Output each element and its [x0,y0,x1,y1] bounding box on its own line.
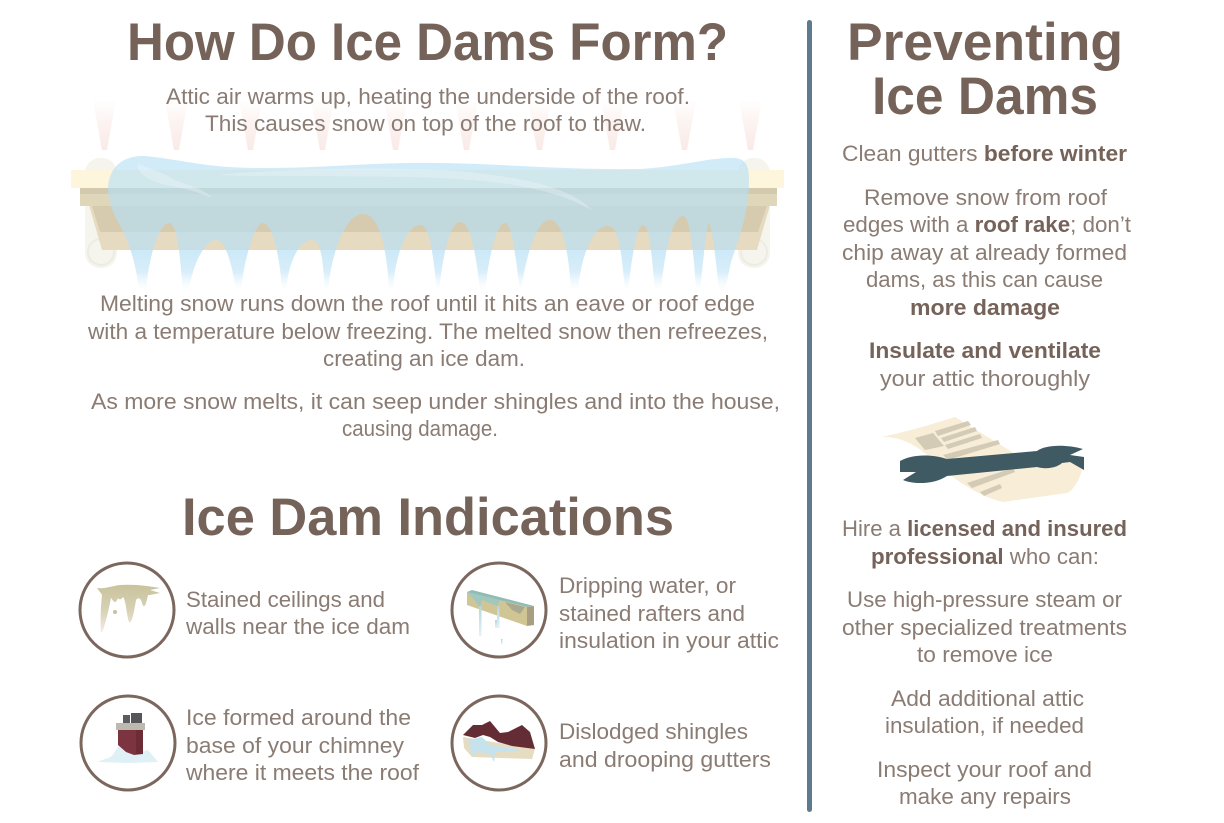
text: high-pressure steam [842,587,1127,667]
snow highlights [138,164,593,211]
icon: dislodged shingles [452,696,546,790]
text: melting snow [87,291,768,371]
text: melting snow: with a temperature below freezing. The melted snow then refreezes, [87,319,768,344]
text: melting snow: creating an ice dam. [323,346,525,371]
text: add insulation: insulation, if needed [885,713,1084,738]
text: insulate and ventilate [869,338,1101,391]
text: dripping water [559,573,779,653]
text: inspect roof: make any repairs [899,784,1071,809]
text: dripping water: stained rafters and [559,601,745,626]
text: stained ceilings [185,587,410,639]
text: as more snow melts: causing damage. [342,416,498,441]
text: dislodged shingles: and drooping gutters [559,747,771,772]
text: remove snow: more damage [910,295,1060,320]
text: dislodged shingles [559,719,771,772]
text: ice around chimney: where it meets the roof [185,760,420,785]
heading: preventing ice dams: Ice Dams [872,67,1098,126]
panel: ice dam indications [80,488,779,790]
text: high-pressure steam: other specialized treatments [842,615,1127,640]
panel: preventing ice dams [842,13,1131,809]
text: as more snow melts [91,389,780,441]
text: insulate and ventilate: your attic thoroughly [880,366,1090,391]
heading: how do ice dams form: How Do Ice Dams Form? [127,13,728,72]
text: inspect roof [877,757,1092,809]
text: ice around chimney: base of your chimney [186,733,404,758]
text: dripping water: Dripping water, or [559,573,736,598]
text: dripping water: insulation in your attic [559,628,779,653]
icon: stained ceiling [80,563,174,657]
heading: preventing ice dams: Preventing [847,13,1123,72]
heading: preventing ice dams [847,13,1123,126]
text: high-pressure steam: Use high-pressure steam or [847,587,1122,612]
text: hire a professional: Hire a licensed and insured [842,516,1127,541]
text: as more snow melts: As more snow melts, it can seep under shingles and into the house, [91,389,780,414]
roof eave [71,170,784,250]
text: remove snow: dams, as this can cause [866,267,1103,292]
heat rising cones [93,100,762,150]
text: hire a professional [842,516,1127,569]
text: ice around chimney [185,705,420,785]
text: inspect roof: Inspect your roof and [877,757,1092,782]
text: attic air warms [166,84,690,136]
text: ice around chimney: Ice formed around the [186,705,411,730]
text: dislodged shingles: Dislodged shingles [559,719,748,744]
text: clean gutters: Clean gutters before winter [842,141,1127,166]
heading: ice dam indications: Ice Dam Indications [182,488,674,547]
text: attic air warms: Attic air warms up, heating the underside of the roof. [166,84,690,109]
panel: how do ice dams form [71,13,784,441]
icon: wrench on document [882,417,1084,502]
text: remove snow: edges with a roof rake; don’t [843,212,1131,237]
text: stained ceilings: walls near the ice dam [185,614,410,639]
text: attic air warms: This causes snow on top of the roof to thaw. [205,111,646,136]
text: add insulation: Add additional attic [891,686,1084,711]
icon: dripping rafter [452,563,546,657]
text: insulate and ventilate: Insulate and ventilate [869,338,1101,363]
text: add insulation [885,686,1084,738]
text: melting snow: Melting snow runs down the roof until it hits an eave or roof edge [100,291,755,316]
text: remove snow: chip away at already formed [842,240,1127,265]
text: remove snow [842,185,1131,320]
icon: chimney with ice [81,696,175,790]
illustration: roof edge with snow and icicles [71,100,784,291]
text: stained ceilings: Stained ceilings and [186,587,385,612]
roof brackets [85,158,770,268]
text: hire a professional: professional who can: [871,544,1099,569]
text: high-pressure steam: to remove ice [917,642,1053,667]
snow and icicles [108,156,749,291]
text: remove snow: Remove snow from roof [864,185,1108,210]
